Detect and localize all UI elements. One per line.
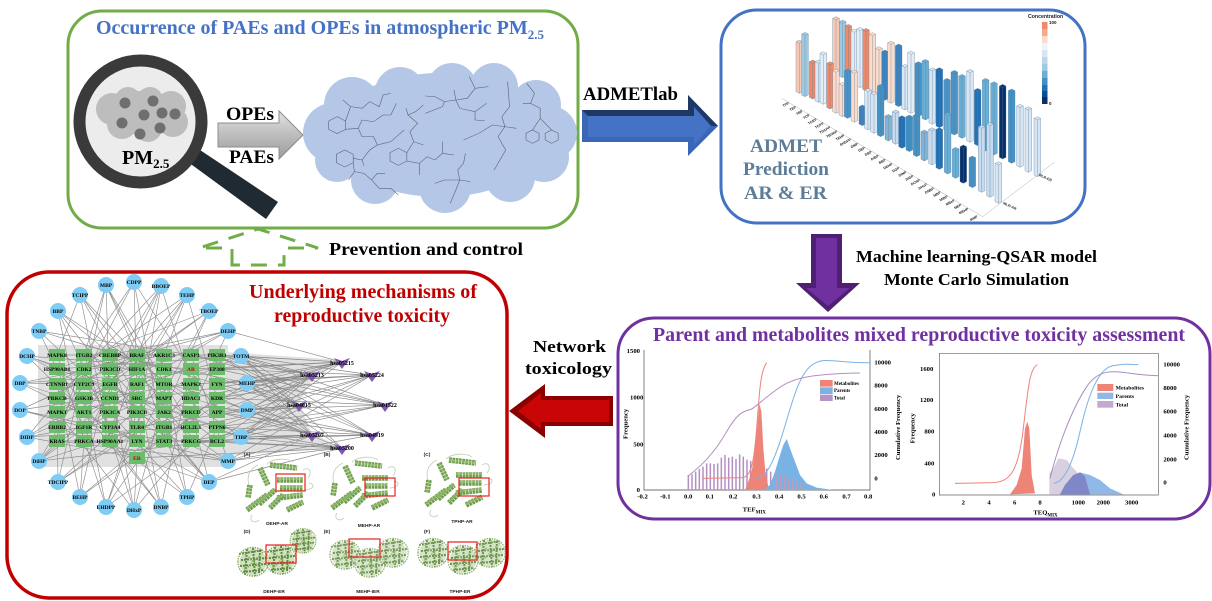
cumulative curves — [688, 360, 870, 478]
network: target proteins: KRAS — [49, 439, 65, 445]
lens label: 2.5 — [153, 156, 170, 171]
network: target proteins: PTPN6 — [208, 425, 226, 431]
network: target proteins: PIK3CA — [100, 410, 120, 416]
network: target proteins: JAK2 — [157, 410, 171, 416]
network: target proteins: CREBBP — [99, 353, 122, 359]
network: target proteins: PRKCD — [181, 410, 201, 416]
text: Monte Carlo Simulation: Monte Carlo Simulation — [884, 270, 1070, 289]
network: KEGG pathways: hsa05213 — [300, 373, 324, 379]
label: ADMETlab: ADMETlab — [583, 84, 678, 105]
network: target proteins — [44, 349, 227, 464]
arrow: ADMETlab blue — [582, 95, 718, 156]
axis numbers: 10000 — [874, 359, 892, 366]
network: KEGG pathways — [287, 358, 397, 455]
network: target proteins: ER — [133, 456, 142, 462]
docking labels: (B) — [324, 452, 331, 458]
docking results: protein structures — [238, 452, 505, 595]
compound axis labels: BBP — [878, 158, 887, 165]
axis titles: Frequency — [622, 408, 629, 439]
network: target proteins: TLR4 — [130, 425, 144, 431]
label: PAEs: PAEs — [229, 147, 274, 168]
network: compounds: TCIPP — [72, 293, 89, 299]
compound axis labels: MiBP — [939, 194, 949, 202]
pathway edges — [137, 331, 385, 482]
axis numbers: -0.1 — [660, 493, 671, 500]
3D bar chart — [782, 17, 1054, 222]
network: target proteins: CYP2C9 — [74, 382, 95, 388]
network: target proteins: ITGB1 — [156, 425, 172, 431]
axis titles — [622, 394, 902, 516]
legend: concentration colour bar — [1028, 14, 1063, 106]
axis numbers: 0.2 — [729, 493, 738, 500]
icon: magnifying glass — [80, 60, 278, 219]
text: Prevention and control: Prevention and control — [329, 239, 523, 259]
axis numbers: 1200 — [920, 397, 934, 404]
text: Network toxicology: Network — [533, 337, 607, 356]
compound axis labels: TCEP — [807, 117, 818, 126]
metabolites histogram — [745, 403, 772, 490]
network: target proteins: IGF1R — [76, 425, 93, 431]
network: KEGG pathways: hsa04015 — [287, 403, 311, 409]
cloud — [303, 63, 577, 213]
network: target proteins: AR — [187, 367, 196, 373]
axis numbers: 0.7 — [842, 493, 851, 500]
network: target proteins: APP — [212, 410, 223, 416]
text: Network toxicology: toxicology — [525, 359, 613, 378]
legend — [820, 380, 859, 401]
protein: MEHP-AR — [332, 457, 398, 520]
docking labels: (C) — [424, 452, 431, 458]
axis numbers: 4000 — [874, 429, 888, 436]
legend: Parents — [1116, 394, 1135, 400]
axis numbers: 800 — [924, 429, 935, 436]
axis numbers: 2 — [962, 499, 966, 506]
axis numbers: -0.2 — [637, 493, 649, 500]
docking labels: MEHP-IER — [356, 589, 380, 595]
network: target proteins: MTOR — [155, 382, 174, 388]
docking labels: TPHP-ER — [449, 589, 471, 595]
axis numbers — [920, 362, 1181, 506]
network: target proteins: STAT3 — [156, 439, 172, 445]
network: compounds: MBP — [100, 283, 113, 289]
compound axis labels: TBP — [795, 109, 804, 116]
network: KEGG pathways: hsa01522 — [373, 403, 397, 409]
axis numbers: 1500 — [627, 348, 641, 355]
network: compounds: DNBP — [154, 505, 169, 511]
network: target proteins: CCND1 — [101, 396, 120, 402]
axis numbers — [627, 348, 892, 500]
protein: MEHP-ER — [330, 539, 408, 577]
lens label: PM — [122, 147, 153, 169]
parents histogram — [763, 439, 833, 490]
docking labels: (E) — [324, 529, 331, 535]
axis numbers: 4 — [987, 499, 991, 506]
compound axis labels: DiBP — [870, 154, 880, 161]
metabolites histogram — [1010, 422, 1035, 494]
compound axis labels: TEP — [789, 105, 797, 112]
axis titles: MIX — [756, 511, 766, 516]
panel title line 2: reproductive toxicity — [274, 305, 450, 327]
network: compounds: DBP — [14, 381, 26, 387]
network: compounds: DOP — [14, 408, 26, 414]
protein: TPHP-AR — [426, 454, 492, 517]
legend: Metabolites — [834, 382, 859, 387]
panel title line 1: Underlying mechanisms of — [249, 281, 477, 303]
network edges — [20, 282, 247, 510]
network: compounds: TDCIPP — [48, 480, 69, 486]
arrow: red leftwards — [509, 384, 613, 438]
axis numbers: 0 — [637, 487, 641, 494]
axis numbers: 6000 — [1163, 409, 1177, 416]
network: target proteins: PRKCG — [181, 439, 202, 445]
axis numbers: 8 — [1038, 499, 1042, 506]
network: compounds: CDPP — [127, 280, 142, 286]
text: Network toxicology — [525, 337, 613, 378]
compound axis labels: DHxP — [918, 182, 928, 191]
network: target proteins: PIK3CB — [127, 410, 147, 416]
network: compounds: DIDP — [20, 435, 34, 441]
panel text: ADMET Prediction AR and ER: AR & ER — [744, 183, 827, 204]
axis numbers: 6 — [1013, 499, 1017, 506]
network: target proteins: BRAF — [130, 353, 145, 359]
network: compounds: MEHP — [239, 381, 256, 387]
legend: Total — [834, 396, 846, 401]
row label: MLR-ER: MLR-ER — [1038, 173, 1053, 183]
network: KEGG pathways: hsa05224 — [360, 373, 384, 379]
arrow: purple downwards — [796, 234, 860, 312]
compound axis labels: MEP — [954, 203, 963, 210]
axis numbers: 2000 — [1163, 456, 1177, 463]
compound axis labels: TEHP — [835, 133, 846, 142]
axis numbers: 0.3 — [752, 493, 761, 500]
compound axis labels: TCP — [802, 113, 811, 120]
axis titles: Cumulative Frequency — [895, 394, 902, 460]
panel: ADMET prediction — [721, 10, 1085, 223]
axis numbers: 0 — [1163, 480, 1167, 487]
protein: DEHP-ER — [238, 529, 316, 576]
panel: mixed reproductive toxicity assessment — [618, 318, 1210, 519]
axis numbers: 8000 — [1163, 385, 1177, 392]
docking labels: (F) — [424, 529, 430, 535]
chart: TEQ mix histogram — [910, 353, 1190, 518]
arrow: gray OPEs PAEs — [218, 111, 303, 159]
network: target proteins: GSK3B — [75, 396, 93, 402]
network: compounds: TEHP — [180, 293, 195, 299]
network: compounds: DCHP — [19, 354, 35, 360]
network: target proteins: CASP3 — [182, 353, 200, 359]
network: target proteins: PRKCB — [47, 396, 67, 402]
compound axis labels: TCPP — [814, 121, 825, 130]
network: target proteins: HSP90AB1 — [44, 367, 71, 373]
network: target proteins: MAPK1 — [47, 410, 67, 416]
panel text: ADMET Prediction AR and ER — [743, 136, 829, 204]
axis numbers: 3000 — [1125, 499, 1139, 506]
network: compounds: TBOEP — [200, 309, 219, 315]
network: target proteins: PIK3CD — [100, 367, 120, 373]
overlap region — [1060, 472, 1090, 494]
panel: underlying mechanisms — [7, 272, 507, 598]
network: KEGG pathways: hsa05200 — [330, 446, 354, 452]
compound axis labels: TBOEP — [826, 129, 839, 139]
label: OPEs: OPEs — [226, 104, 274, 125]
compound axis labels: EHDPP — [839, 137, 852, 147]
docking labels: TPHP-AR — [451, 519, 473, 525]
network: compounds: DMP — [241, 408, 254, 414]
docking labels: DEHP-AR — [266, 521, 288, 527]
legend: Parents — [834, 389, 850, 394]
overlap total bars — [777, 474, 801, 490]
network: target proteins: HDAC1 — [182, 396, 201, 402]
axis numbers: 0.1 — [706, 493, 714, 500]
axis numbers: 4000 — [1163, 432, 1177, 439]
network: target proteins: EP300 — [209, 367, 225, 373]
network: target proteins: SRC — [131, 396, 143, 402]
axis numbers: 10000 — [1163, 362, 1181, 369]
network: target proteins: CYP3A4 — [100, 425, 121, 431]
network: target proteins: BCL2 — [210, 439, 224, 445]
network: compounds: DiHP — [32, 459, 46, 465]
protein: DEHP-AR — [247, 459, 313, 522]
axis numbers: 0 — [874, 475, 878, 482]
network: target proteins: MAPK3 — [181, 382, 201, 388]
legend: Metabolites — [1116, 386, 1145, 392]
compound axis labels: DOP — [892, 166, 901, 173]
network: target proteins: CDK2 — [77, 367, 92, 373]
panel text: ADMET Prediction AR and ER: Prediction — [743, 159, 829, 180]
network: target proteins: BCL2L1 — [181, 425, 201, 431]
compound axis labels: MMP — [969, 214, 979, 222]
compound axis labels: DEHP — [883, 162, 894, 170]
compound axis labels: MBzP — [945, 198, 956, 207]
compound axis labels: DINP — [898, 170, 908, 178]
axis numbers: 0.8 — [864, 493, 873, 500]
axis titles: MIX — [1047, 513, 1058, 518]
axis numbers: 0.6 — [820, 493, 829, 500]
legend: concentration colour bar: 0 — [1049, 101, 1052, 106]
compound axis labels: DMP — [850, 142, 859, 149]
compound axis labels: MEHP — [958, 207, 970, 215]
axis numbers: 0.0 — [684, 493, 693, 500]
axis titles: Frequency — [910, 412, 917, 443]
network: target proteins: HSP90AA1 — [97, 439, 124, 445]
chart: TEF mix histogram — [622, 348, 902, 516]
compound axis labels: MBP — [933, 190, 942, 198]
network: target proteins: MAPT — [156, 396, 172, 402]
network: target proteins: PRKCA — [74, 439, 94, 445]
network: target proteins: KDR — [211, 396, 224, 402]
compound axis labels: DIDP — [905, 174, 915, 182]
axis titles — [910, 394, 1190, 518]
axis numbers: 1000 — [1072, 499, 1086, 506]
total histogram — [1049, 458, 1090, 494]
compound axis labels: DNBP — [924, 186, 935, 195]
network: target proteins: AKR1C3 — [153, 353, 175, 359]
axis numbers: 400 — [924, 460, 935, 467]
axis numbers: 6000 — [874, 406, 888, 413]
docking labels: (D) — [244, 529, 251, 535]
network: target proteins: EGFR — [102, 382, 119, 388]
network: compounds — [12, 274, 256, 518]
docking labels: (A) — [244, 452, 251, 458]
compound axis labels: DCHP — [910, 178, 921, 187]
axis numbers: 8000 — [874, 383, 888, 390]
network: KEGG pathways: hsa05215 — [330, 361, 354, 367]
axis numbers: 0.4 — [775, 493, 784, 500]
network: target proteins: PIK3R1 — [207, 353, 227, 359]
parents histogram — [1060, 472, 1123, 494]
molecular structures — [329, 77, 558, 203]
network: target proteins: ITGB2 — [76, 353, 92, 359]
network: compounds: DEHP — [220, 329, 236, 335]
compound axis labels — [782, 101, 979, 222]
network: compounds: DHxP — [127, 508, 142, 514]
total bars — [688, 454, 797, 490]
axis numbers: 2000 — [874, 452, 888, 459]
axis titles: TEF — [743, 507, 756, 514]
network: compounds: TNBP — [32, 329, 47, 335]
network: compounds: EHDPP — [97, 505, 116, 511]
front row bars — [796, 32, 1002, 203]
axis titles: Cumulative Frequency — [1183, 394, 1190, 460]
compound axis labels: TDCPP — [819, 125, 832, 135]
chart axes — [782, 98, 1054, 217]
network: target proteins: AKT1 — [77, 410, 92, 416]
panel title: Occurrence of PAEs and OPEs in atmospheric PM — [96, 17, 528, 39]
network: target proteins: FYN — [211, 382, 223, 388]
cumulative curves — [955, 364, 1158, 483]
network: compounds: MMP — [221, 459, 236, 465]
legend: Total — [1116, 402, 1128, 408]
panel title: Parent and metabolites mixed reproductive toxicity assessment — [653, 324, 1185, 346]
compound axis labels: DEP — [858, 146, 866, 153]
network: compounds: BEHP — [73, 495, 88, 501]
axis numbers: 2000 — [1097, 499, 1111, 506]
text: Machine learning-QSAR model: Machine learning-QSAR model — [856, 247, 1097, 266]
axis numbers: 0 — [932, 491, 936, 498]
axis numbers: 0.5 — [797, 493, 806, 500]
legend: concentration colour bar: Concentration — [1028, 14, 1063, 20]
protein: TPHP-ER — [418, 539, 505, 574]
axis titles: TEQ — [1033, 509, 1047, 516]
compound axis labels: DBP — [864, 150, 873, 157]
network: compounds: BBOEP — [152, 284, 171, 290]
network: compounds: DEP — [204, 480, 215, 486]
legend: concentration colour bar: 100 — [1049, 20, 1057, 25]
network: target proteins: MAPK8 — [47, 353, 67, 359]
network: compounds: TPHP — [180, 495, 195, 501]
compound axis labels: TPP — [782, 101, 790, 108]
panel text: ADMET Prediction AR and ER: ADMET — [750, 136, 822, 157]
network: compounds: BBP — [53, 309, 64, 315]
panel title: 2.5 — [528, 27, 544, 42]
network: KEGG pathways: hsa04919 — [360, 433, 384, 439]
network: target proteins: ERBB2 — [48, 425, 66, 431]
network: target proteins: HIF1A — [129, 367, 145, 373]
network: compounds: TOTM — [233, 354, 250, 360]
network: compounds: TIBP — [235, 435, 248, 441]
network: target proteins: CTNNB1 — [46, 382, 68, 388]
network: target proteins: RAF1 — [130, 382, 144, 388]
docking labels: MEHP-AR — [358, 523, 381, 529]
back row bars — [833, 17, 1041, 177]
binding site boxes — [266, 474, 489, 563]
axis numbers: 1600 — [920, 366, 934, 373]
axis numbers: 1000 — [630, 395, 644, 402]
particle cloud — [96, 87, 188, 142]
row label: MLR-AR: MLR-AR — [1002, 201, 1017, 211]
network edge density shading — [38, 345, 342, 467]
axis numbers: 500 — [633, 441, 644, 448]
dashed arrow: prevention and control feedback — [199, 229, 318, 265]
network: target proteins: LYN — [131, 439, 143, 445]
docking labels — [244, 452, 473, 595]
docking labels: DEHP-ER — [263, 589, 285, 595]
legend — [1097, 384, 1145, 408]
network: target proteins: CDK1 — [157, 367, 172, 373]
network: KEGG pathways: hsa05207 — [300, 433, 324, 439]
panel: occurrence of PAEs and OPEs — [68, 11, 578, 228]
